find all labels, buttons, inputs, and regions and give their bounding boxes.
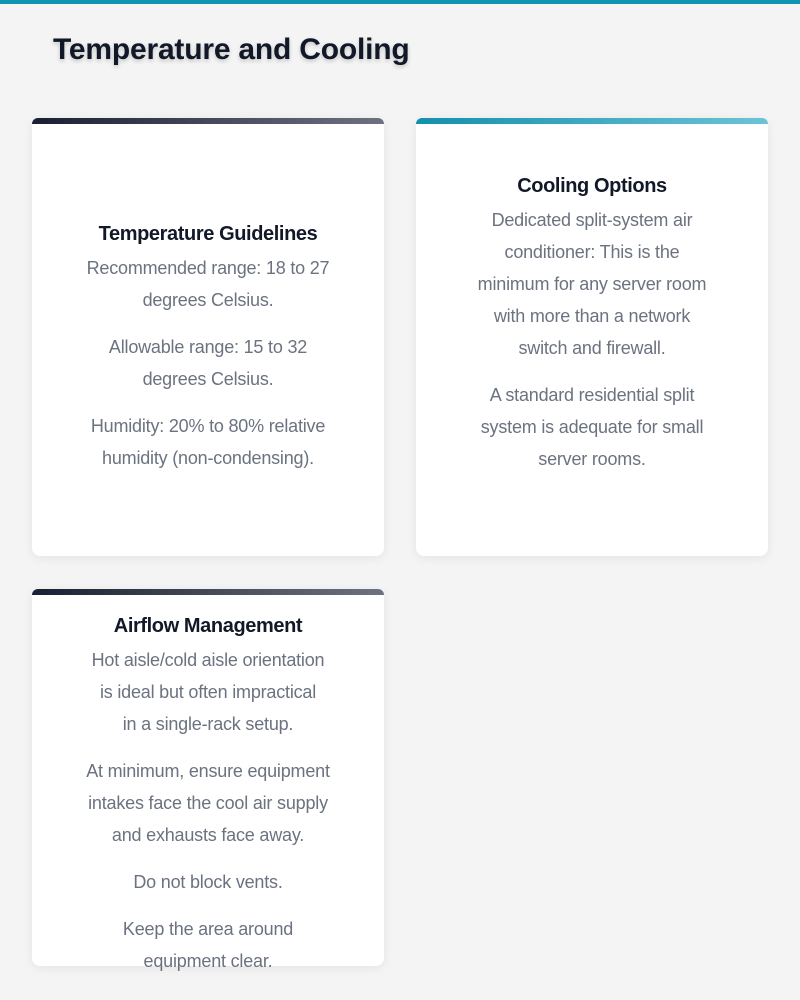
text block: temperature guidelines: Allowable range: 15 to 32 (109, 337, 307, 357)
text block: airflow management: intakes face the cool air supply (88, 793, 328, 813)
panel: temperature guidelines (32, 118, 384, 556)
text block: airflow management: Hot aisle/cold aisle orientation (92, 650, 324, 670)
panel: airflow management (32, 589, 384, 966)
text block: cooling options: Cooling Options (517, 175, 667, 197)
title: Temperature and Cooling (53, 33, 410, 66)
text block: temperature guidelines (87, 223, 329, 468)
text block: airflow management: equipment clear. (144, 951, 272, 971)
text block: cooling options: server rooms. (538, 449, 646, 469)
text block: airflow management: is ideal but often impractical (100, 682, 316, 702)
text block: cooling options: Dedicated split-system air (492, 210, 692, 230)
text block: cooling options: conditioner: This is the (505, 242, 679, 262)
text block: cooling options (478, 175, 706, 469)
text block: temperature guidelines: degrees Celsius. (143, 290, 273, 310)
text block: temperature guidelines: degrees Celsius. (143, 369, 273, 389)
text block: airflow management (86, 615, 330, 971)
text block: airflow management: Airflow Management (114, 615, 302, 637)
text block: temperature guidelines: Humidity: 20% to 80% relative (91, 416, 325, 436)
text block: airflow management: Do not block vents. (133, 872, 283, 892)
text block: cooling options: system is adequate for small (481, 417, 703, 437)
text block: temperature guidelines: humidity (non-condensing). (102, 448, 314, 468)
text block: temperature guidelines: Temperature Guidelines (99, 223, 317, 245)
text block: cooling options: A standard residential split (490, 385, 694, 405)
text block: airflow management: and exhausts face away. (112, 825, 304, 845)
text block: temperature guidelines: Recommended range: 18 to 27 (87, 258, 329, 278)
text block: cooling options: switch and firewall. (518, 338, 666, 358)
text block: airflow management: At minimum, ensure equipment (86, 761, 330, 781)
panel: cooling options (416, 118, 768, 556)
text block: cooling options: minimum for any server room (478, 274, 706, 294)
text block: cooling options: with more than a network (494, 306, 690, 326)
text block: airflow management: Keep the area around (123, 919, 293, 939)
text block: airflow management: in a single-rack setup. (123, 714, 293, 734)
